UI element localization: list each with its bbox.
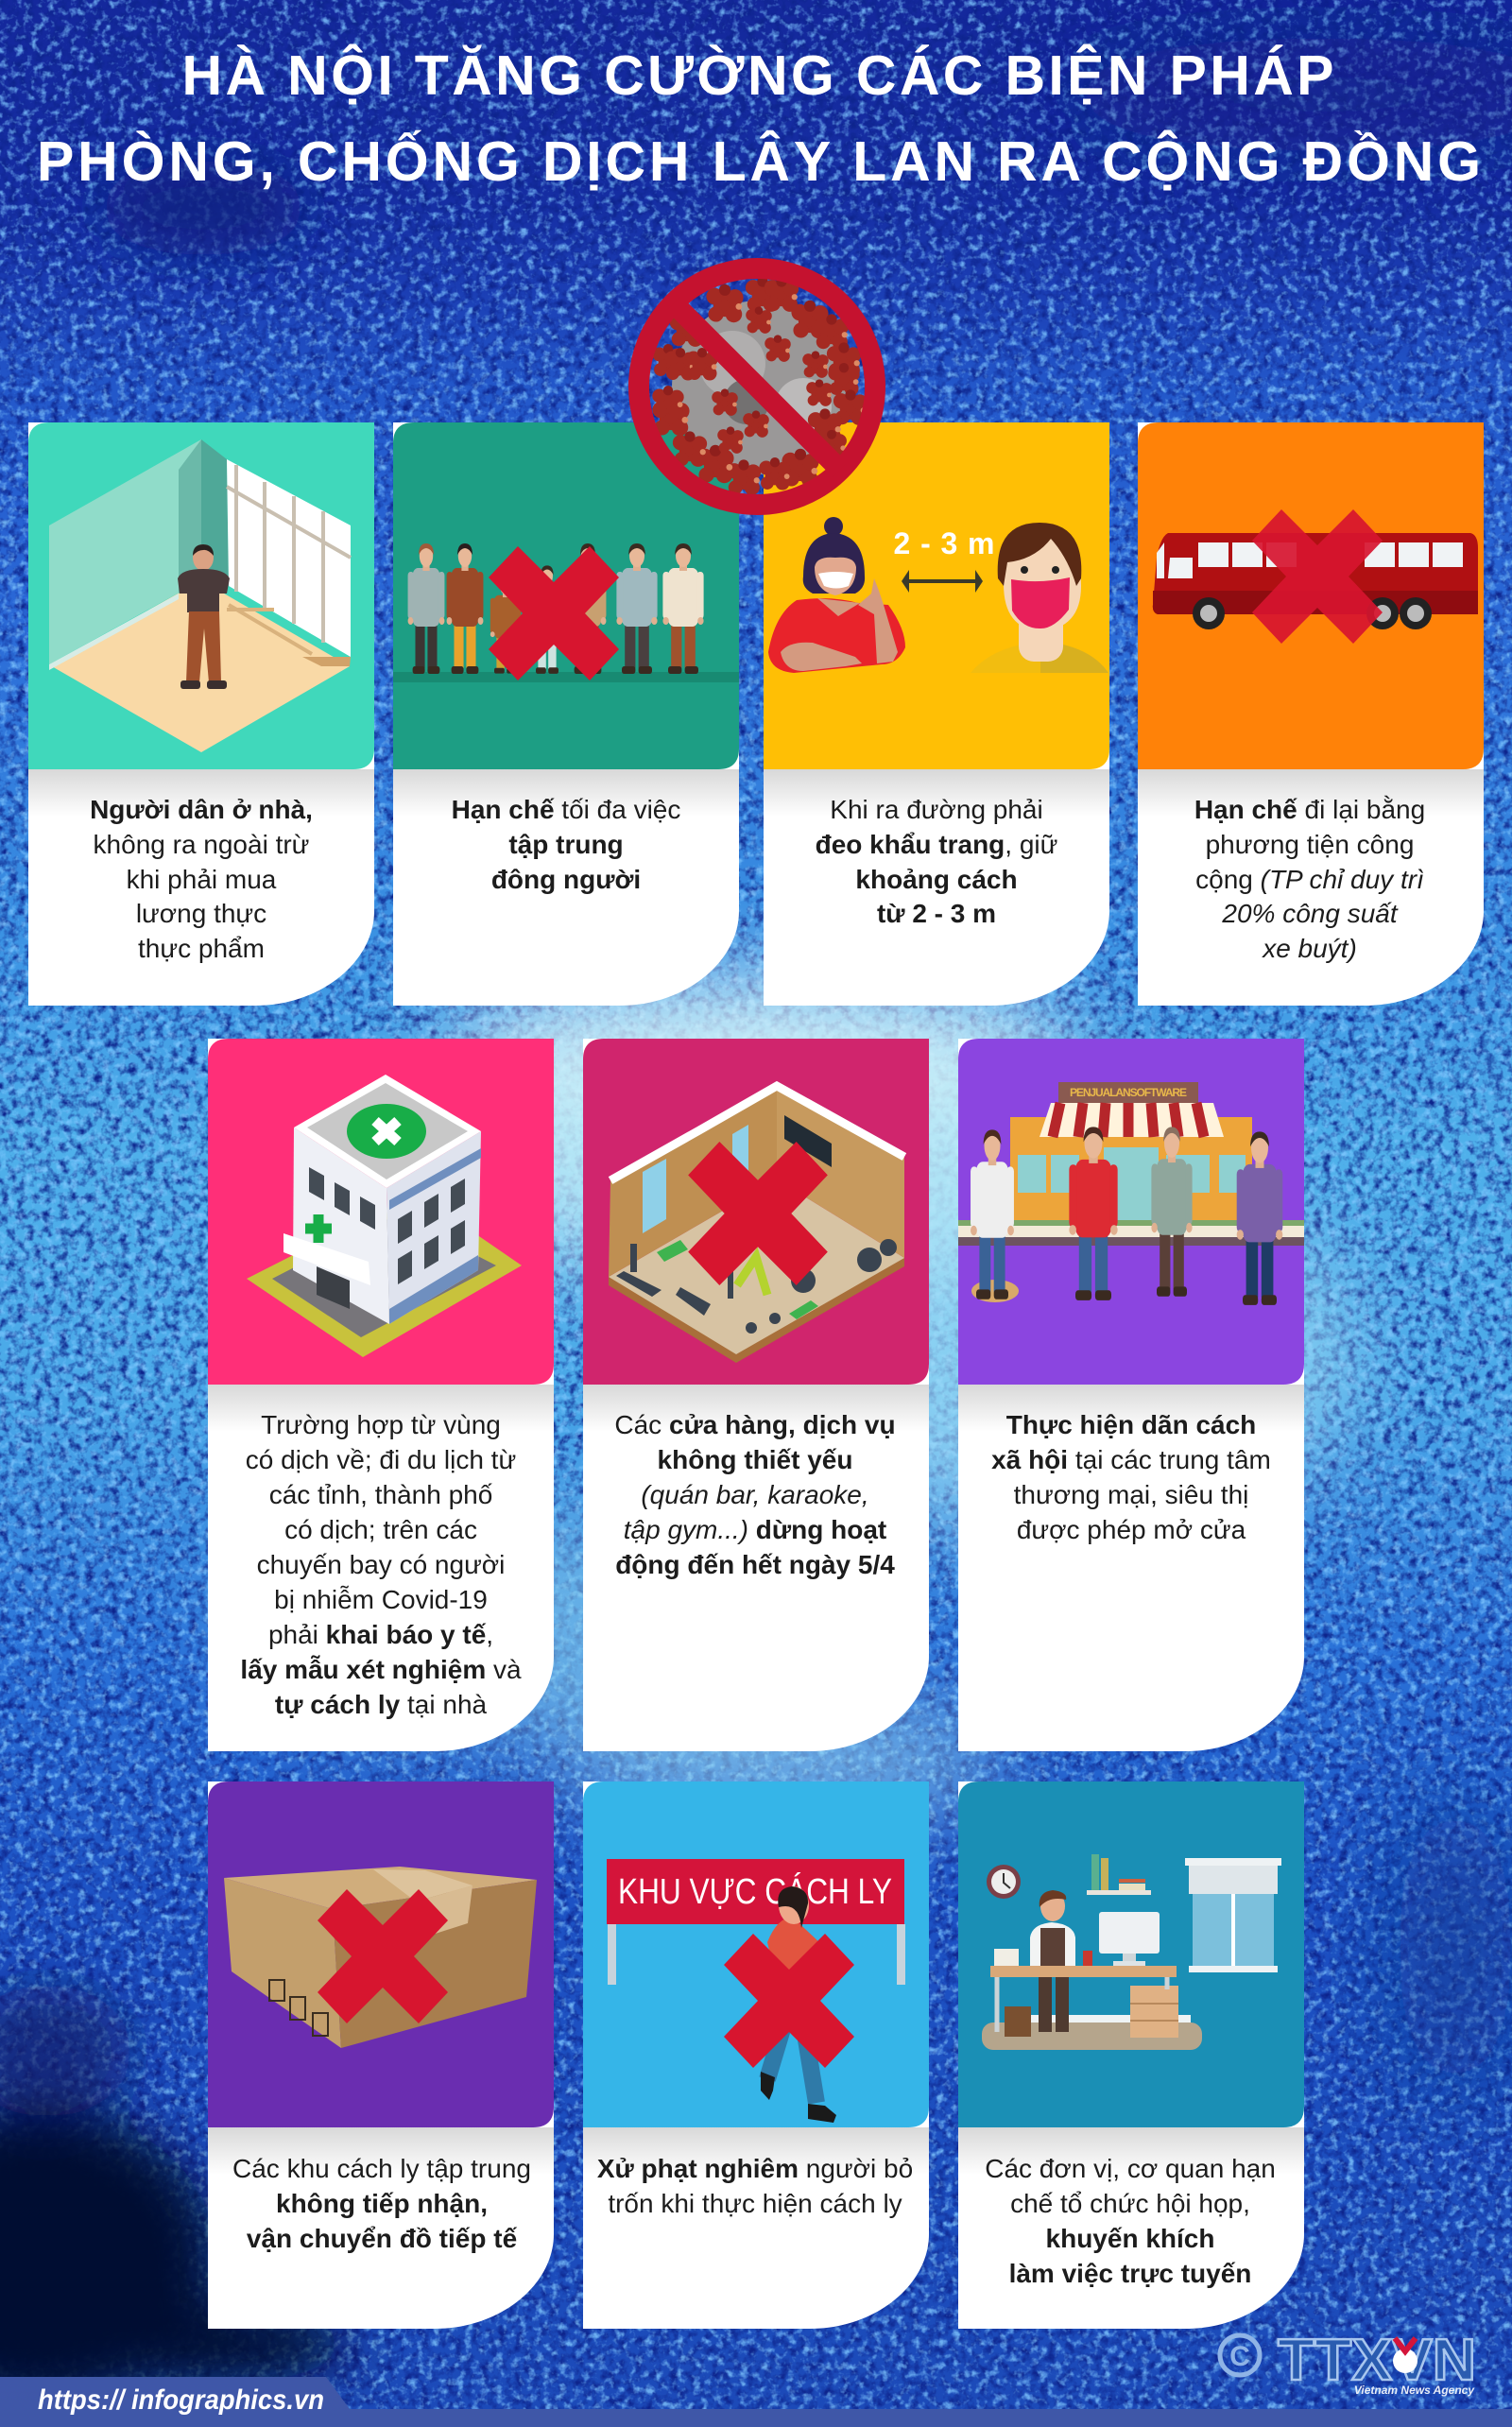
text: medical declaration: chuyến bay có người (257, 1550, 505, 1579)
title: HÀ NỘI TĂNG CƯỜNG CÁC BIỆN PHÁP (181, 43, 1334, 107)
text: limit public transport: phương tiện công (1206, 830, 1414, 859)
illustration: person fleeing (761, 1886, 836, 2123)
text: non-essential services closed: cửa hàng, dịch vụ (669, 1410, 896, 1439)
icon: red cross (688, 1142, 828, 1285)
text: social distancing: thương mại, siêu thị (1014, 1480, 1248, 1509)
text: medical declaration: tại nhà (400, 1690, 488, 1719)
text: masks and distance: Khi ra đường phải (830, 795, 1043, 824)
illustration: gym (609, 1086, 904, 1363)
illustration: quarantine banner (607, 1859, 905, 1985)
text: medical declaration: khai báo y tế, (326, 1620, 493, 1649)
illustration: crowd (408, 543, 704, 674)
text: limit public transport: đi lại bằng (1297, 795, 1425, 824)
text: limit public transport: xe buýt) (1261, 934, 1357, 963)
panel: medical declaration (208, 1039, 554, 1751)
illustration: quarantine banner: KHU VỰC CÁCH LY (618, 1871, 892, 1912)
text: masks and distance: , giữ (1005, 830, 1057, 859)
panel: stay at home (28, 422, 374, 1006)
text: medical declaration: tự cách ly (275, 1690, 401, 1719)
text: medical declaration: có dịch; trên các (284, 1515, 477, 1544)
footer source bar (0, 2377, 1512, 2427)
illustration: woman with mask (768, 517, 905, 673)
text: punish quarantine evasion: trốn khi thực hiện cách ly (608, 2189, 902, 2218)
panel: punish quarantine evasion (583, 1782, 929, 2329)
text: non-essential services closed: (quán bar, karaoke, (641, 1480, 869, 1509)
text: punish quarantine evasion: người bỏ (799, 2154, 913, 2183)
text: masks and distance: từ 2 - 3 m (877, 899, 996, 928)
text: remote work: khuyến khích (1046, 2224, 1214, 2253)
text: stay at home: thực phẩm (138, 934, 265, 963)
text: limit public transport: (TP chỉ duy trì (1261, 865, 1424, 894)
panel: remote work (958, 1782, 1304, 2329)
text: stay at home: Người dân ở nhà, (90, 795, 313, 824)
text: remote work: làm việc trực tuyến (1009, 2259, 1251, 2288)
text: non-essential services closed: không thiết yếu (658, 1445, 852, 1474)
text: no deliveries to quarantine: vận chuyển đồ tiếp tế (247, 2224, 518, 2253)
icon: red cross (1252, 509, 1383, 644)
text: limit public transport: cộng (1195, 865, 1261, 894)
panel: no deliveries to quarantine (208, 1782, 554, 2329)
panel: no gatherings (393, 422, 739, 1006)
icon: red cross (489, 546, 619, 680)
illustration: storefront and queue (958, 1082, 1304, 1305)
text: medical declaration: và (486, 1655, 522, 1684)
text: stay at home: khi phải mua (127, 865, 277, 894)
title: PHÒNG, CHỐNG DỊCH LÂY LAN RA CỘNG ĐỒNG (37, 129, 1481, 193)
text: no gatherings: đông người (491, 865, 641, 894)
text: social distancing: tại các trung tâm (1068, 1445, 1271, 1474)
icon: virus prohibited (639, 268, 875, 505)
panel: masks and distance (764, 422, 1109, 1006)
illustration: storefront and queue: PENJUALANSOFTWARE (1070, 1086, 1187, 1099)
text: non-essential services closed: động đến hết ngày 5/4 (615, 1550, 895, 1579)
text: non-essential services closed: Các (614, 1410, 669, 1439)
logo: TTXVN: C (1229, 2341, 1250, 2372)
illustration: man with mask (971, 523, 1108, 673)
text: medical declaration: có dịch về; đi du lịch từ (246, 1445, 516, 1474)
text: medical declaration: phải (268, 1620, 326, 1649)
text: medical declaration: lấy mẫu xét nghiệm (240, 1655, 486, 1684)
text: no gatherings: Hạn chế (452, 795, 555, 824)
text: limit public transport: 20% công suất (1221, 899, 1399, 928)
icon: red cross (724, 1934, 854, 2068)
text: social distancing: Thực hiện dãn cách (1006, 1410, 1256, 1439)
text: masks and distance: đeo khẩu trang (816, 830, 1005, 859)
text: remote work: Các đơn vị, cơ quan hạn (985, 2154, 1276, 2183)
illustration: home office (982, 1854, 1281, 2050)
text: no deliveries to quarantine: không tiếp nhận, (276, 2189, 488, 2218)
text: social distancing: được phép mở cửa (1017, 1515, 1246, 1544)
text: limit public transport: Hạn chế (1194, 795, 1297, 824)
panel: limit public transport (1138, 422, 1484, 1006)
text: stay at home: lương thực (136, 899, 266, 928)
footer source bar: https:// infographics.vn (38, 2384, 324, 2416)
text: no deliveries to quarantine: Các khu cách ly tập trung (232, 2154, 531, 2183)
panel: non-essential services closed (583, 1039, 929, 1751)
title (37, 43, 1481, 193)
illustration: person in room (49, 439, 351, 752)
arrow: distance (902, 570, 983, 593)
text: medical declaration: các tỉnh, thành phố (269, 1480, 493, 1509)
label: distance: 2 - 3 m (894, 526, 994, 560)
logo: TTXVN: Vietnam News Agency (1354, 2384, 1475, 2397)
text: stay at home: không ra ngoài trừ (94, 830, 309, 859)
text: medical declaration: bị nhiễm Covid-19 (274, 1585, 488, 1614)
icon: red cross (318, 1889, 448, 2023)
text: masks and distance: khoảng cách (855, 865, 1018, 894)
text: no gatherings: tập trung (508, 830, 624, 859)
illustration: bus (1153, 533, 1478, 629)
logo: TTXVN: TTXVN (1278, 2328, 1476, 2393)
text: remote work: chế tổ chức hội họp, (1010, 2189, 1250, 2218)
text: social distancing: xã hội (991, 1445, 1068, 1474)
text: non-essential services closed: dừng hoạt (756, 1515, 886, 1544)
illustration: hospital (247, 1075, 522, 1357)
text: medical declaration: Trường hợp từ vùng (261, 1410, 501, 1439)
text: non-essential services closed: tập gym...) (624, 1515, 756, 1544)
illustration: cardboard box (224, 1867, 537, 2048)
text: punish quarantine evasion: Xử phạt nghiêm (597, 2154, 799, 2183)
panel: social distancing (958, 1039, 1304, 1751)
text: no gatherings: tối đa việc (555, 795, 680, 824)
